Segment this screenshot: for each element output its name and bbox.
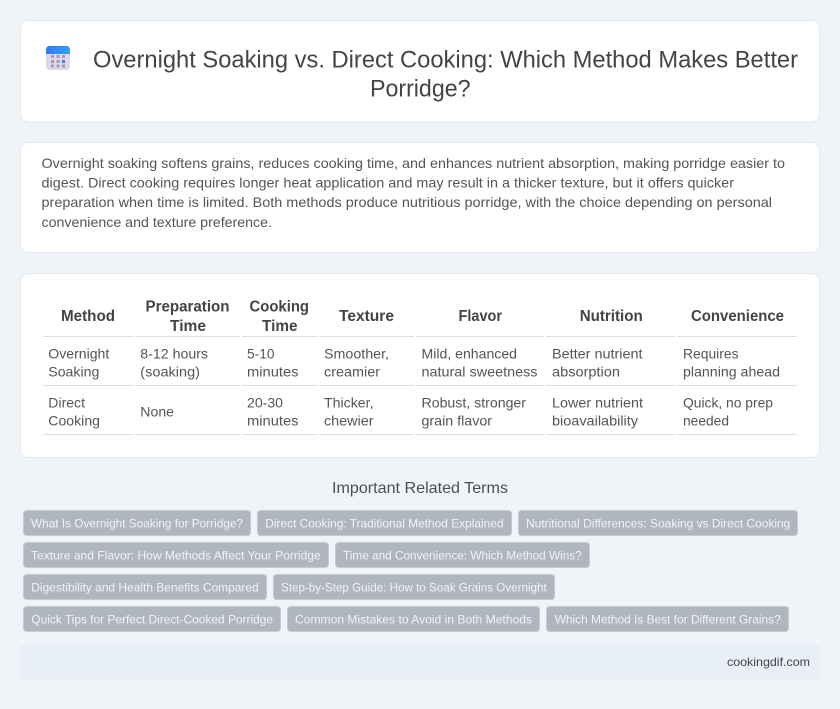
table row: overnight soaking: (soaking) <box>140 363 200 379</box>
table row: overnight soaking: Better nutrient <box>552 345 643 361</box>
table header row: Method <box>61 308 115 325</box>
title <box>93 46 798 102</box>
title: Porridge? <box>370 75 470 102</box>
panel: description: convenience and texture preference. <box>42 214 272 230</box>
table row: direct cooking: grain flavor <box>422 412 492 428</box>
title: Overnight Soaking vs. Direct Cooking: Which Method Makes Better <box>93 46 798 74</box>
table row: direct cooking: Direct <box>48 394 85 410</box>
table row: direct cooking: 20-30 <box>247 394 283 410</box>
table row: overnight soaking: creamier <box>324 363 380 379</box>
panel: description <box>20 142 820 252</box>
icon: calendar <box>46 46 70 70</box>
table row: overnight soaking: planning ahead <box>683 363 780 379</box>
table header row <box>61 299 784 335</box>
tag row 3: Digestibility and Health Benefits Compared <box>31 580 259 594</box>
tag row 1: Direct Cooking: Traditional Method Explained <box>265 516 504 530</box>
footer bar <box>20 645 820 679</box>
table header row: Time <box>170 318 206 335</box>
tag row 1: What Is Overnight Soaking for Porridge? <box>31 516 243 530</box>
tag row 2: Time and Convenience: Which Method Wins? <box>343 548 582 562</box>
table header row: Cooking <box>250 299 309 316</box>
table row: overnight soaking: natural sweetness <box>422 363 538 379</box>
table row: overnight soaking: Overnight <box>48 345 109 361</box>
table row: overnight soaking: Smoother, <box>324 345 389 361</box>
table row: overnight soaking: 5-10 <box>247 345 275 361</box>
tag row 4: Quick Tips for Perfect Direct-Cooked Porridge <box>31 612 273 626</box>
table header row: Nutrition <box>580 308 643 325</box>
tag row 4: Common Mistakes to Avoid in Both Methods <box>295 612 532 626</box>
table row: overnight soaking: absorption <box>552 363 620 379</box>
table row: direct cooking: needed <box>683 412 729 428</box>
panel: description: preparation when time is limited. Both methods produce nutritious porridge, with the choice depending on personal <box>42 194 772 210</box>
table header row: Convenience <box>691 308 784 325</box>
table row: direct cooking: Cooking <box>48 412 100 428</box>
table row: direct cooking: Thicker, <box>324 394 374 410</box>
table row: overnight soaking: minutes <box>247 363 298 379</box>
panel: description: digest. Direct cooking requires longer heat application and may result in a thicker texture, but it offers quicker <box>42 175 734 191</box>
table row: direct cooking: minutes <box>247 412 298 428</box>
tag row 4: Which Method Is Best for Different Grains? <box>555 612 781 626</box>
tag row 2 <box>24 542 590 568</box>
table row: direct cooking: Quick, no prep <box>683 394 773 410</box>
table row: overnight soaking <box>48 345 780 379</box>
table row: direct cooking: None <box>140 403 174 419</box>
panel: description: Overnight soaking softens grains, reduces cooking time, and enhances nutrient absorption, making porridge easier to <box>42 155 785 171</box>
table row: direct cooking: Lower nutrient <box>552 394 643 410</box>
footer bar: cookingdif.com <box>727 655 810 669</box>
table row: direct cooking <box>48 394 773 428</box>
tag row 3: Step-by-Step Guide: How to Soak Grains Overnight <box>281 580 547 594</box>
heading: important related terms: Important Related Terms <box>332 480 508 497</box>
table row: overnight soaking: Soaking <box>48 363 99 379</box>
table row: direct cooking: Robust, stronger <box>422 394 526 410</box>
table header row: Preparation <box>146 299 230 316</box>
table row: overnight soaking: 8-12 hours <box>140 345 208 361</box>
tag row 3 <box>24 574 554 600</box>
tag row 1: Nutritional Differences: Soaking vs Direct Cooking <box>526 516 790 530</box>
table row: direct cooking: chewier <box>324 412 374 428</box>
table header row: Flavor <box>458 308 502 325</box>
tag row 1 <box>24 510 798 536</box>
panel: comparison table <box>20 274 820 458</box>
table row: direct cooking: bioavailability <box>552 412 638 428</box>
tag row 2: Texture and Flavor: How Methods Affect Your Porridge <box>31 548 321 562</box>
table row: overnight soaking: Mild, enhanced <box>422 345 517 361</box>
tag row 4 <box>24 606 788 632</box>
table header row: Texture <box>339 308 394 325</box>
table header row: Time <box>262 318 298 335</box>
panel: title header <box>20 20 820 122</box>
panel: related term tags <box>24 510 798 632</box>
table row: overnight soaking: Requires <box>683 345 738 361</box>
